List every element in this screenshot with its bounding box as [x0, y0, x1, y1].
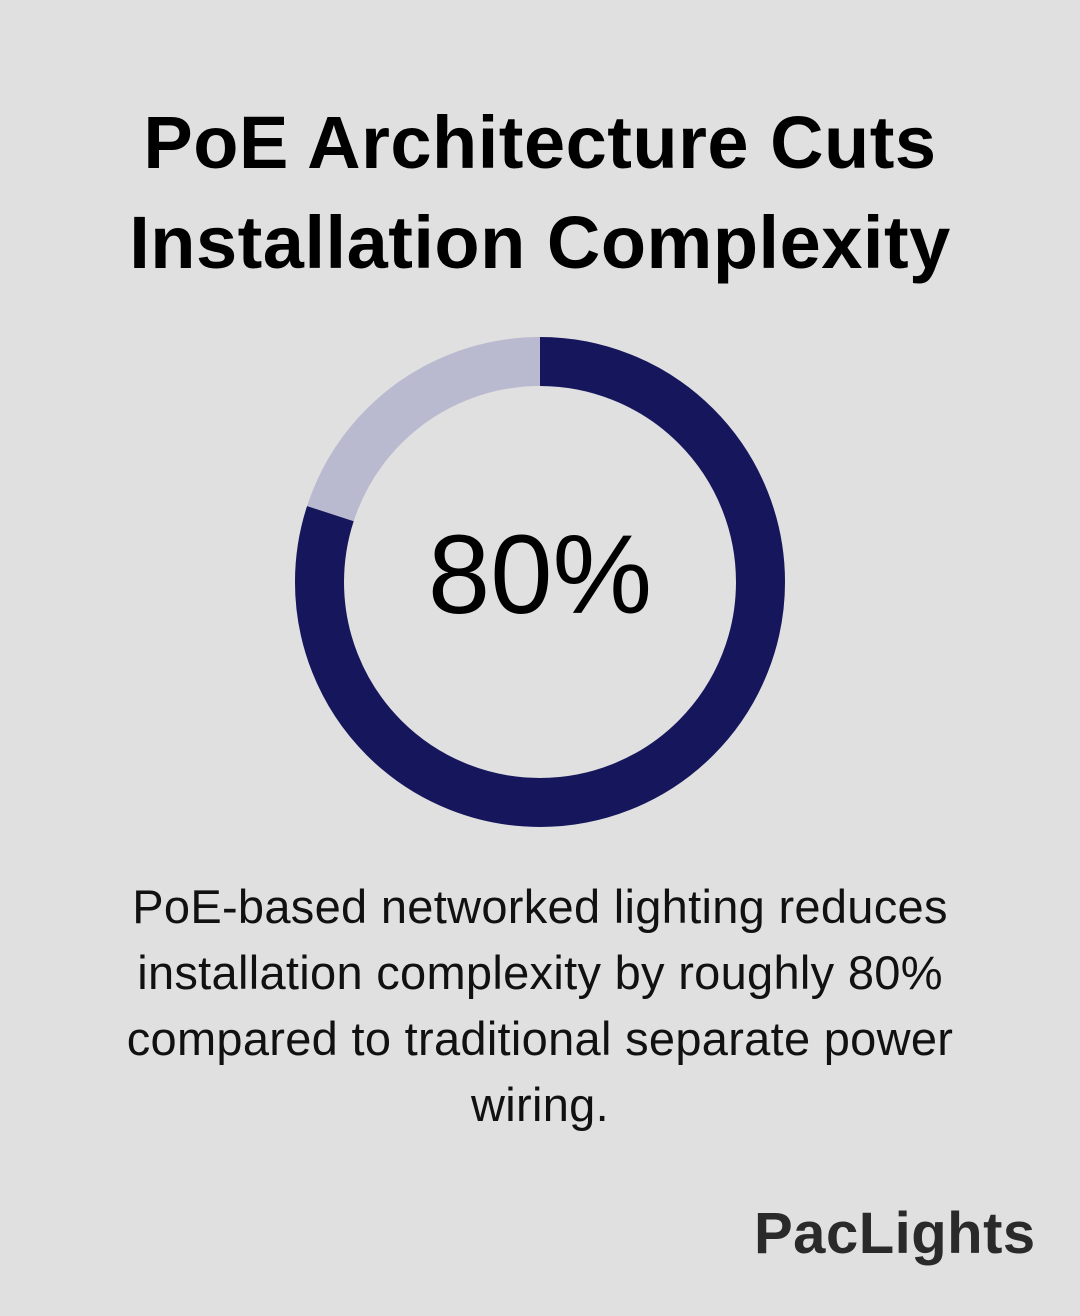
description text: wiring. [471, 1078, 609, 1131]
donut segment: 80% [320, 362, 760, 802]
donut track: remaining 20% [320, 362, 760, 802]
center value: 80% [428, 512, 652, 637]
title: Installation Complexity [129, 201, 951, 284]
description text: installation complexity by roughly 80% [137, 946, 943, 999]
logo: PacLights [754, 1201, 1036, 1266]
description text [127, 880, 953, 1131]
title [129, 101, 951, 284]
description text: PoE-based networked lighting reduces [132, 880, 948, 933]
title: PoE Architecture Cuts [143, 101, 937, 184]
description text: compared to traditional separate power [127, 1012, 953, 1065]
